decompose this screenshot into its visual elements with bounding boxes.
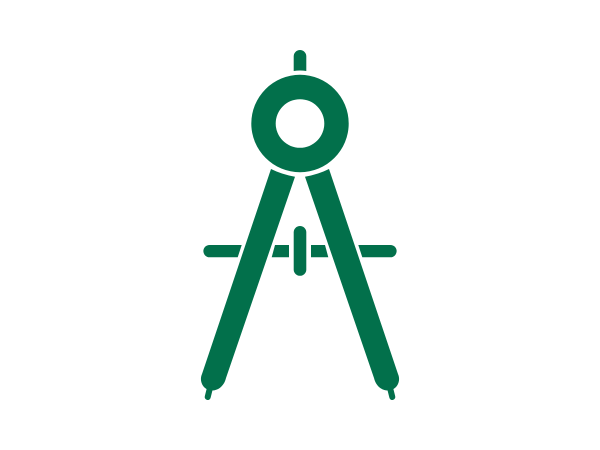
- crossbar right end: [358, 245, 397, 257]
- right leg tip: [390, 389, 392, 397]
- left leg tip: [208, 389, 210, 397]
- left leg: [201, 169, 295, 390]
- crossbar left end: [203, 245, 242, 257]
- right leg: [305, 169, 399, 390]
- crossbar inner right segment: [311, 245, 328, 257]
- crossbar inner left segment: [272, 245, 289, 257]
- top handle: [294, 50, 306, 71]
- compass hinge ring: [251, 75, 349, 172]
- center adjustment knob: [294, 226, 306, 276]
